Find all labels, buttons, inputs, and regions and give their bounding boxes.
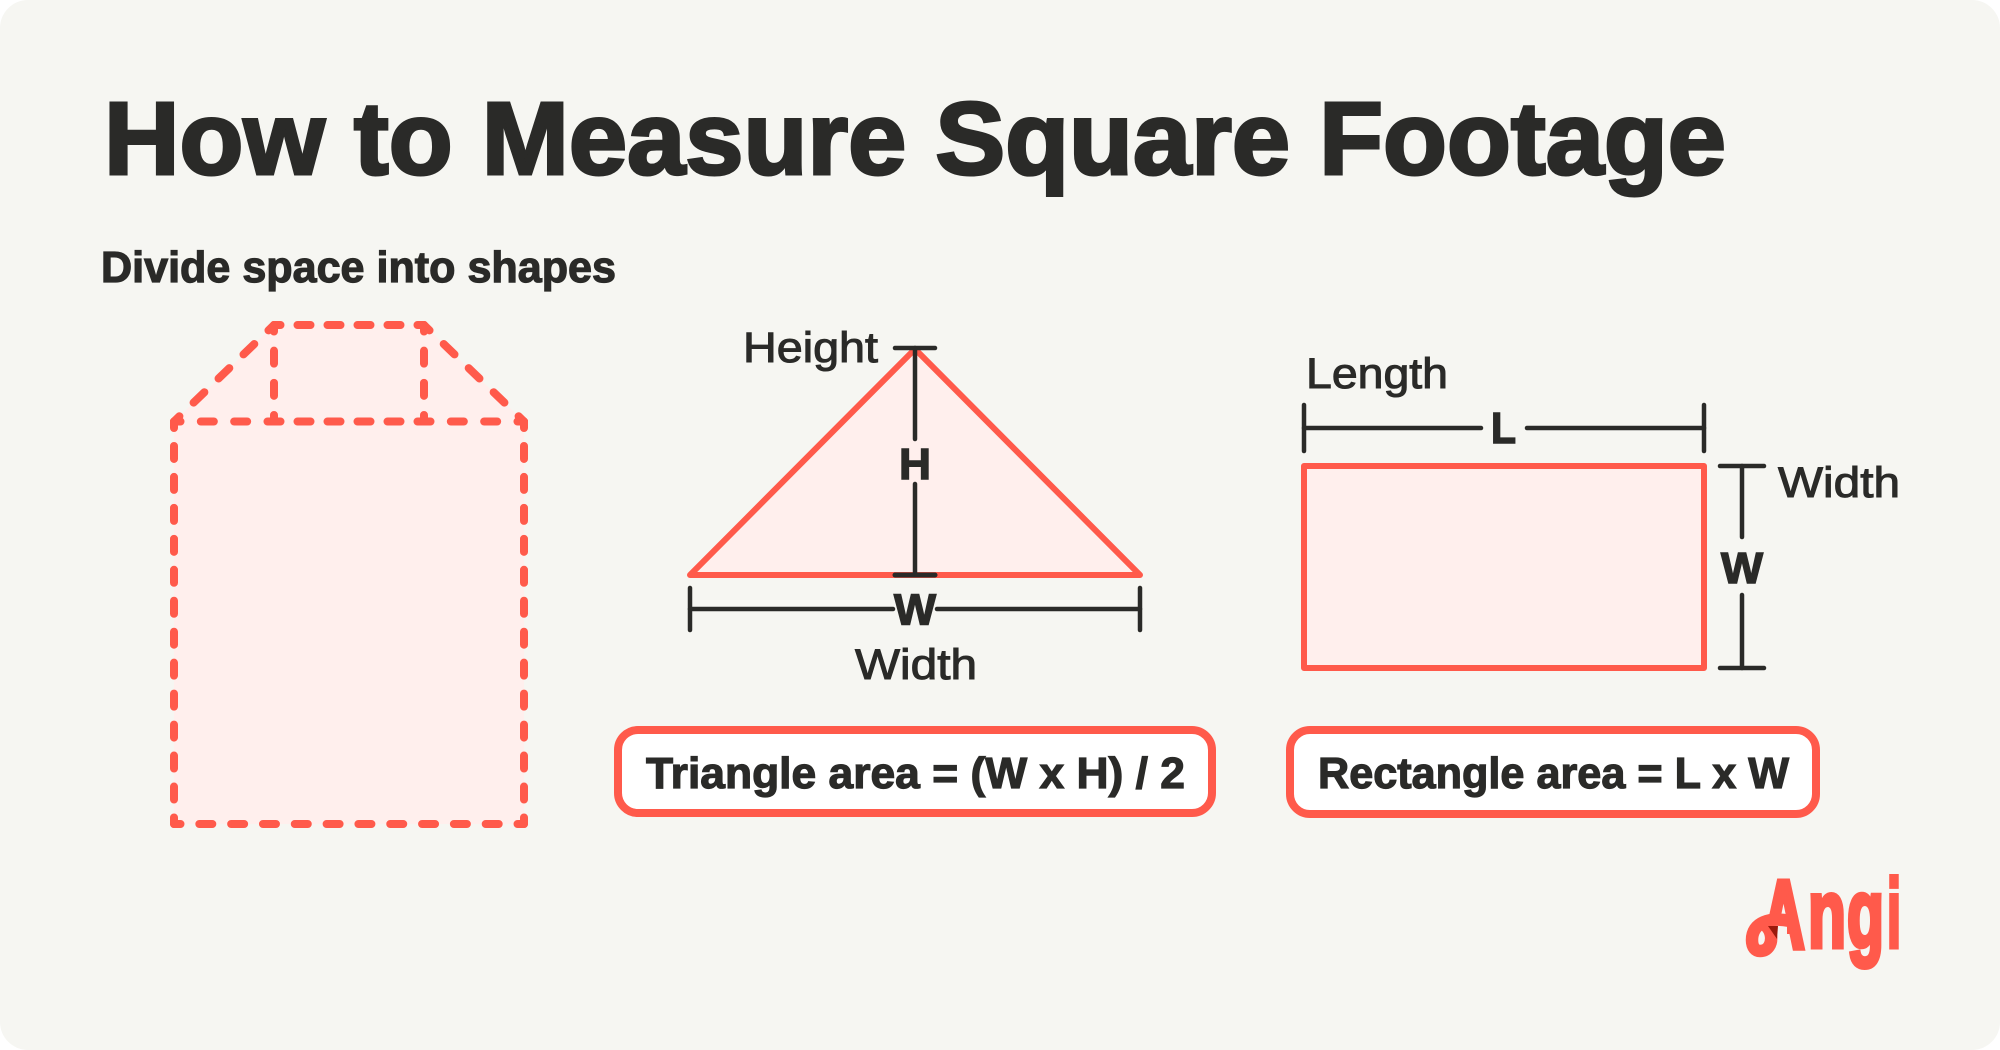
rectangle shape — [1304, 466, 1704, 668]
height dimension line — [895, 348, 935, 575]
subheading: Divide space into shapes — [101, 243, 616, 292]
width dimension line — [690, 588, 1140, 630]
diagram: space divided into shapes — [174, 325, 524, 824]
title: How to Measure Square Footage — [104, 81, 1726, 196]
diagram: triangle — [690, 324, 1140, 689]
width letter: W — [1721, 544, 1763, 593]
width label: Width — [855, 641, 977, 689]
formula box: triangle area — [618, 730, 1212, 813]
logo: Angi: A — [1763, 862, 1804, 968]
triangle shape — [690, 349, 1140, 575]
length letter: L — [1491, 404, 1516, 453]
logo: Angi: n — [1808, 859, 1846, 968]
height letter: H — [899, 440, 931, 489]
width dimension line — [1720, 466, 1764, 668]
logo: Angi: g — [1847, 859, 1884, 968]
formula box: rectangle area: Rectangle area = L x W — [1318, 749, 1789, 798]
logo: Angi — [1752, 859, 1901, 968]
logo: Angi: i — [1887, 859, 1901, 968]
width label: Width — [1778, 459, 1900, 507]
diagram: rectangle — [1304, 350, 1900, 668]
formula box: rectangle area — [1290, 730, 1816, 814]
height label: Height — [743, 324, 878, 372]
width letter: W — [894, 586, 936, 634]
length label: Length — [1306, 350, 1448, 398]
formula box: triangle area: Triangle area = (W x H) / 2 — [646, 749, 1185, 798]
length dimension line — [1304, 405, 1704, 451]
